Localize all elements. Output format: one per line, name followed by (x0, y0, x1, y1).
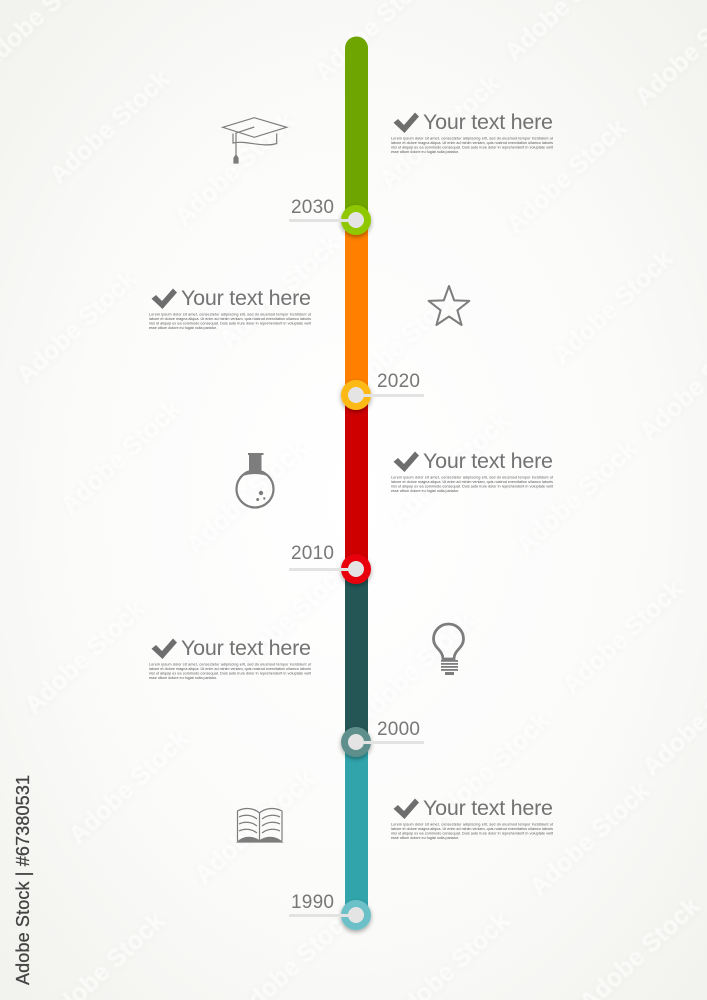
text block 1: labore et dolore magna aliqua. Ut enim ad minim veniam, quis nostrud exercitation ullamco laboris (391, 141, 553, 145)
watermark pattern: Adobe Stock (557, 575, 688, 699)
text block 3: Lorem ipsum dolor sit amet, consectetur adipiscing elit, sed do eiusmod tempor incididunt ut (391, 476, 553, 480)
marker 2030: 2030 (291, 197, 334, 218)
text block 3: labore et dolore magna aliqua. Ut enim ad minim veniam, quis nostrud exercitation ullamco laboris (391, 480, 553, 484)
marker 2010: 2010 (291, 543, 334, 564)
watermark pattern: Adobe Stock (11, 265, 142, 389)
text block 2: labore et dolore magna aliqua. Ut enim ad minim veniam, quis nostrud exercitation ullamco laboris (149, 317, 311, 321)
marker 2010 (289, 543, 371, 584)
watermark pattern: Adobe Stock (181, 435, 312, 559)
marker 2000 (341, 719, 424, 757)
segment: teal (345, 742, 368, 915)
watermark pattern: Adobe Stock (224, 557, 355, 681)
marker 2020 (341, 371, 424, 410)
text block 2: esse cillum dolore eu fugiat nulla pariatur. (149, 326, 217, 330)
text block 4: labore et dolore magna aliqua. Ut enim ad minim veniam, quis nostrud exercitation ullamco laboris (149, 667, 311, 671)
watermark pattern: Adobe Stock (19, 595, 150, 719)
text block 3: esse cillum dolore eu fugiat nulla pariatur. (391, 489, 459, 493)
text block 5: labore et dolore magna aliqua. Ut enim ad minim veniam, quis nostrud exercitation ullamco laboris (391, 827, 553, 831)
text block 4: Your text here (181, 636, 311, 660)
text block 1: nisi ut aliquip ex ea commodo consequat. Duis aute irure dolor in reprehenderit in voluptate velit (391, 146, 553, 150)
watermark pattern: Adobe Stock (55, 395, 186, 519)
text block 2: Your text here (181, 286, 311, 310)
watermark pattern: Adobe Stock (501, 114, 632, 238)
watermark pattern: Adobe Stock (384, 407, 515, 531)
watermark pattern: Adobe Stock (334, 282, 465, 406)
text block 5: nisi ut aliquip ex ea commodo consequat. Duis aute irure dolor in reprehenderit in voluptate velit (391, 832, 553, 836)
icon: open book (238, 809, 282, 842)
stock credit: Adobe Stock | #67380531 (13, 775, 33, 985)
segment: orange (345, 220, 368, 396)
watermark pattern: Adobe Stock (349, 607, 480, 731)
watermark pattern: Adobe Stock (63, 725, 194, 849)
text block 4: Lorem ipsum dolor sit amet, consectetur adipiscing elit, sed do eiusmod tempor incididunt ut (149, 662, 311, 666)
watermark pattern: Adobe Stock (424, 707, 555, 831)
text block 3: nisi ut aliquip ex ea commodo consequat. Duis aute irure dolor in reprehenderit in voluptate velit (391, 484, 553, 488)
timeline bar (345, 36, 368, 915)
marker 1990 (289, 892, 371, 930)
segment: green (345, 36, 368, 222)
text block 1 (391, 110, 553, 154)
icon: flask (236, 453, 274, 508)
icon: light bulb (434, 624, 464, 675)
watermark pattern: Adobe Stock (374, 70, 505, 194)
watermark pattern: Adobe Stock (547, 245, 678, 369)
marker 2020: 2020 (377, 371, 420, 392)
segment: dark teal (345, 569, 368, 743)
text block 2 (149, 286, 311, 330)
icon: graduation cap (223, 118, 287, 163)
text block 4: esse cillum dolore eu fugiat nulla pariatur. (149, 676, 217, 680)
text block 4: nisi ut aliquip ex ea commodo consequat. Duis aute irure dolor in reprehenderit in voluptate velit (149, 672, 311, 676)
icon: star (429, 286, 469, 325)
text block 2: nisi ut aliquip ex ea commodo consequat. Duis aute irure dolor in reprehenderit in voluptate velit (149, 322, 311, 326)
marker 1990: 1990 (291, 892, 334, 913)
text block 4 (149, 636, 311, 680)
watermark pattern: Adobe Stock (169, 107, 300, 231)
text block 1: Lorem ipsum dolor sit amet, consectetur adipiscing elit, sed do eiusmod tempor incididunt ut (391, 136, 553, 140)
watermark pattern: Adobe Stock (189, 765, 320, 889)
text block 2: Lorem ipsum dolor sit amet, consectetur adipiscing elit, sed do eiusmod tempor incididunt ut (149, 312, 311, 316)
text block 5: esse cillum dolore eu fugiat nulla pariatur. (391, 836, 459, 840)
watermark pattern: Adobe Stock (511, 435, 642, 559)
marker 2000: 2000 (377, 719, 420, 740)
watermark pattern: Adobe Stock (524, 777, 655, 901)
text block 5: Lorem ipsum dolor sit amet, consectetur adipiscing elit, sed do eiusmod tempor incididunt ut (391, 822, 553, 826)
watermark pattern: Adobe Stock (214, 230, 345, 354)
text block 5: Your text here (423, 796, 553, 820)
marker 2030 (289, 197, 371, 235)
text block 1: Your text here (423, 110, 553, 134)
text block 5 (391, 796, 553, 840)
watermark pattern: Adobe Stock (44, 65, 175, 189)
segment: red (345, 395, 368, 570)
text block 3: Your text here (423, 449, 553, 473)
text block 1: esse cillum dolore eu fugiat nulla pariatur. (391, 150, 459, 154)
text block 3 (391, 449, 553, 493)
